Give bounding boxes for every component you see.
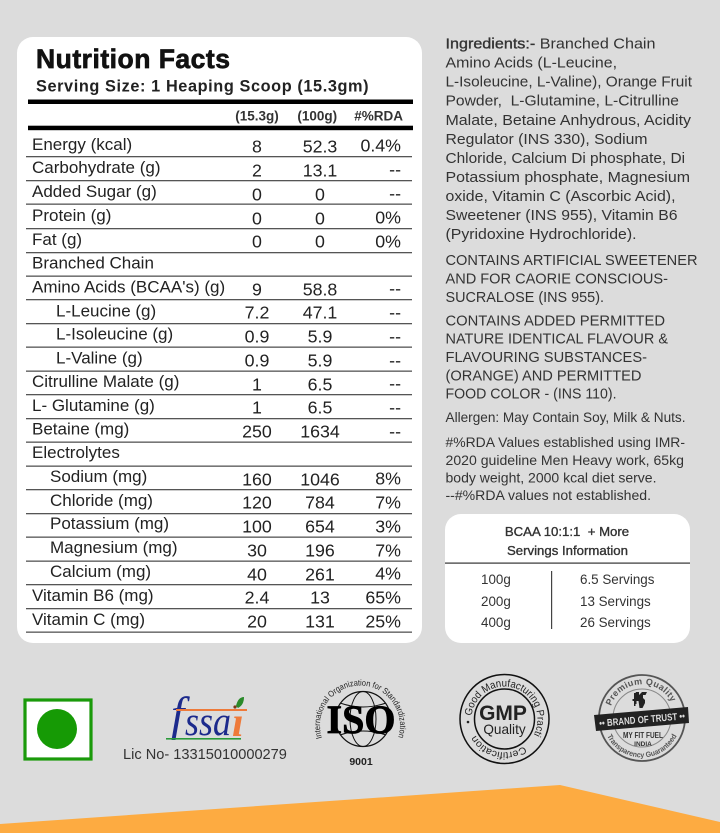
- badge: ISO 9001: International Organization for Standardization: [314, 679, 406, 739]
- table rows: 20: [247, 612, 267, 632]
- table header: #%RDA: [354, 109, 403, 124]
- RDA note: 2020 guideline Men Heavy work, 65kg: [446, 453, 684, 468]
- table rows: 196: [305, 541, 335, 561]
- table rows: Chloride (mg): [50, 491, 153, 510]
- ingredients text: Chloride, Calcium Di phosphate, Di: [446, 150, 685, 167]
- table rows: 0%: [375, 208, 401, 228]
- flavour notice: FLAVOURING SUBSTANCES-: [446, 350, 647, 366]
- servings table: 26 Servings: [580, 615, 651, 630]
- table rows: 1046: [300, 470, 340, 490]
- flavour notice: [446, 314, 668, 402]
- table rows: 160: [242, 470, 272, 490]
- table rows: 25%: [365, 612, 401, 632]
- table rows: 0%: [375, 232, 401, 252]
- table header: (100g): [297, 109, 337, 124]
- orange footer band: [0, 785, 720, 833]
- table rows: --: [389, 351, 401, 371]
- badge: brand of trust: INDIA: [634, 741, 652, 748]
- table rows: 13: [310, 588, 330, 608]
- ingredients text: Sweetener (INS 955), Vitamin B6: [446, 207, 678, 224]
- artificial sweetener notice: [446, 253, 698, 306]
- table rows: 784: [305, 493, 335, 513]
- table rows: --: [389, 184, 401, 204]
- table rows: 1: [252, 398, 262, 418]
- table rows: L-Leucine (g): [56, 302, 156, 320]
- servings heading: Servings Information: [507, 543, 628, 558]
- serving size: Serving Size: 1 Heaping Scoop (15.3gm): [36, 78, 369, 96]
- table rows: 6.5: [308, 398, 332, 418]
- table rows: 0.9: [245, 351, 269, 371]
- table rows: Energy (kcal): [32, 135, 132, 154]
- panel: nutrition facts: [17, 37, 422, 643]
- table rows: Sodium (mg): [50, 467, 147, 486]
- flavour notice: (ORANGE) AND PERMITTED: [446, 368, 642, 384]
- table rows: --: [389, 327, 401, 347]
- table rows: 4%: [375, 564, 401, 584]
- table rows: [26, 135, 412, 633]
- panel: servings information: [445, 514, 690, 643]
- ingredients text: Amino Acids (L-Leucine,: [446, 54, 617, 71]
- table rows: 1634: [300, 422, 340, 442]
- table rows: --: [389, 303, 401, 323]
- table rows: 8%: [375, 469, 401, 489]
- table rows: --: [389, 398, 401, 418]
- table rows: Betaine (mg): [32, 420, 129, 438]
- icon: vegetarian mark: [25, 700, 91, 759]
- servings table: 400g: [481, 615, 511, 630]
- table rows: 2: [252, 161, 262, 181]
- table rows: 6.5: [308, 375, 332, 395]
- badge: GMP quality: [459, 674, 550, 764]
- table rows: 5.9: [308, 327, 332, 347]
- table rows: 1: [252, 375, 262, 395]
- badge: GMP quality: Certification: [472, 736, 526, 760]
- table rows: 7.2: [245, 303, 269, 323]
- RDA note: body weight, 2000 kcal diet serve.: [446, 471, 656, 486]
- table rows: 5.9: [308, 351, 332, 371]
- table rows: --: [389, 374, 401, 394]
- badge: GMP quality: Good Manufacturing Practice: [465, 679, 544, 738]
- allergen note: Allergen: May Contain Soy, Milk & Nuts.: [446, 410, 686, 425]
- badge: brand of trust: [594, 674, 689, 762]
- table rows: Added Sugar (g): [32, 182, 157, 201]
- ingredients text: L-Isoleucine, L-Valine), Orange Fruit: [446, 74, 693, 90]
- table rows: 40: [247, 565, 267, 585]
- table rows: L- Glutamine (g): [32, 396, 155, 415]
- ingredients text: Malate, Betaine Anhydrous, Acidity: [446, 112, 691, 129]
- table rows: --: [389, 279, 401, 299]
- table rows: 0.4%: [360, 136, 401, 156]
- RDA note: [446, 435, 685, 503]
- table rows: 120: [242, 493, 272, 513]
- table rows: 13.1: [303, 161, 337, 181]
- table rows: 0: [315, 185, 325, 205]
- table header: [28, 100, 413, 130]
- table rows: 58.8: [303, 280, 337, 300]
- title: Nutrition Facts: [36, 44, 230, 74]
- servings table: [481, 572, 655, 630]
- table rows: --: [389, 422, 401, 442]
- table rows: Electrolytes: [32, 443, 120, 462]
- servings heading: [505, 524, 629, 558]
- badge: brand of trust: Transparency Guaranteed: [608, 734, 676, 759]
- table rows: 3%: [375, 517, 401, 537]
- table rows: Protein (g): [32, 206, 111, 225]
- table rows: 0: [315, 209, 325, 229]
- table rows: 0: [252, 232, 262, 252]
- table rows: --: [389, 160, 401, 180]
- license number: Lic No- 13315010000279: [123, 747, 287, 763]
- logo: fssai: [166, 688, 247, 746]
- table rows: 7%: [375, 541, 401, 561]
- table rows: 0.9: [245, 327, 269, 347]
- flavour notice: FOOD COLOR - (INS 110).: [446, 386, 616, 402]
- ingredients text: oxide, Vitamin C (Ascorbic Acid),: [446, 188, 676, 205]
- servings table: 100g: [481, 572, 511, 587]
- table rows: 250: [242, 422, 272, 442]
- artificial sweetener notice: AND FOR CAORIE CONSCIOUS-: [446, 272, 668, 288]
- ingredients text: Ingredients:- Branched Chain: [446, 35, 656, 52]
- ingredients text: Regulator (INS 330), Sodium: [446, 131, 648, 148]
- table rows: 47.1: [303, 303, 337, 323]
- badge: ISO 9001: ISO: [327, 697, 395, 742]
- table rows: 131: [305, 612, 335, 632]
- servings heading: BCAA 10:1:1 + More: [505, 524, 629, 539]
- table rows: 2.4: [245, 588, 269, 608]
- table rows: 65%: [365, 588, 401, 608]
- table rows: 8: [252, 137, 262, 157]
- table rows: 30: [247, 541, 267, 561]
- table rows: 100: [242, 517, 272, 537]
- table rows: Vitamin C (mg): [32, 610, 145, 629]
- servings table: 6.5 Servings: [580, 572, 655, 587]
- table rows: L-Isoleucine (g): [56, 324, 173, 344]
- badge: GMP quality: GMP: [479, 702, 527, 725]
- RDA note: #%RDA Values established using IMR-: [446, 435, 685, 450]
- table rows: 52.3: [303, 137, 337, 157]
- table rows: Citrulline Malate (g): [32, 372, 179, 391]
- badge: brand of trust: MY FIT FUEL: [623, 731, 663, 740]
- table rows: 0: [252, 185, 262, 205]
- logo: fssai: f: [171, 688, 190, 741]
- table rows: 0: [315, 232, 325, 252]
- artificial sweetener notice: CONTAINS ARTIFICIAL SWEETENER: [446, 253, 698, 269]
- table rows: Magnesium (mg): [50, 538, 178, 557]
- badge: GMP quality: Quality: [483, 722, 526, 737]
- table rows: L-Valine (g): [56, 348, 143, 368]
- logo: fssai: ı: [232, 700, 244, 746]
- table rows: Fat (g): [32, 230, 82, 249]
- ingredients text: Powder, L-Glutamine, L-Citrulline: [446, 93, 679, 110]
- table rows: Vitamin B6 (mg): [32, 586, 154, 605]
- RDA note: --#%RDA values not established.: [446, 488, 651, 503]
- table rows: 0: [252, 209, 262, 229]
- badge: ISO 9001: [314, 679, 406, 768]
- servings table: 200g: [481, 594, 511, 609]
- table rows: 7%: [375, 493, 401, 513]
- artificial sweetener notice: SUCRALOSE (INS 955).: [446, 290, 604, 306]
- table rows: 9: [252, 280, 262, 300]
- ingredients text: [446, 35, 693, 243]
- badge: ISO 9001: 9001: [349, 756, 373, 768]
- badge: brand of trust: Premium Quality: [606, 678, 676, 706]
- table rows: Branched Chain: [32, 254, 154, 272]
- table rows: 654: [305, 517, 335, 537]
- badge: brand of trust: •• BRAND OF TRUST ••: [599, 711, 686, 730]
- table rows: Amino Acids (BCAA's) (g): [32, 278, 225, 296]
- servings table: 13 Servings: [580, 594, 651, 609]
- table rows: Calcium (mg): [50, 562, 151, 581]
- ingredients text: Potassium phosphate, Magnesium: [446, 169, 690, 186]
- flavour notice: CONTAINS ADDED PERMITTED: [446, 314, 665, 330]
- table rows: 261: [305, 565, 335, 585]
- flavour notice: NATURE IDENTICAL FLAVOUR &: [446, 332, 668, 348]
- ingredients text: (Pyridoxine Hydrochloride).: [446, 226, 636, 243]
- table rows: Potassium (mg): [50, 514, 169, 533]
- logo: fssai: ssa: [185, 698, 231, 744]
- table header: (15.3g): [235, 109, 279, 124]
- table rows: Carbohydrate (g): [32, 158, 161, 177]
